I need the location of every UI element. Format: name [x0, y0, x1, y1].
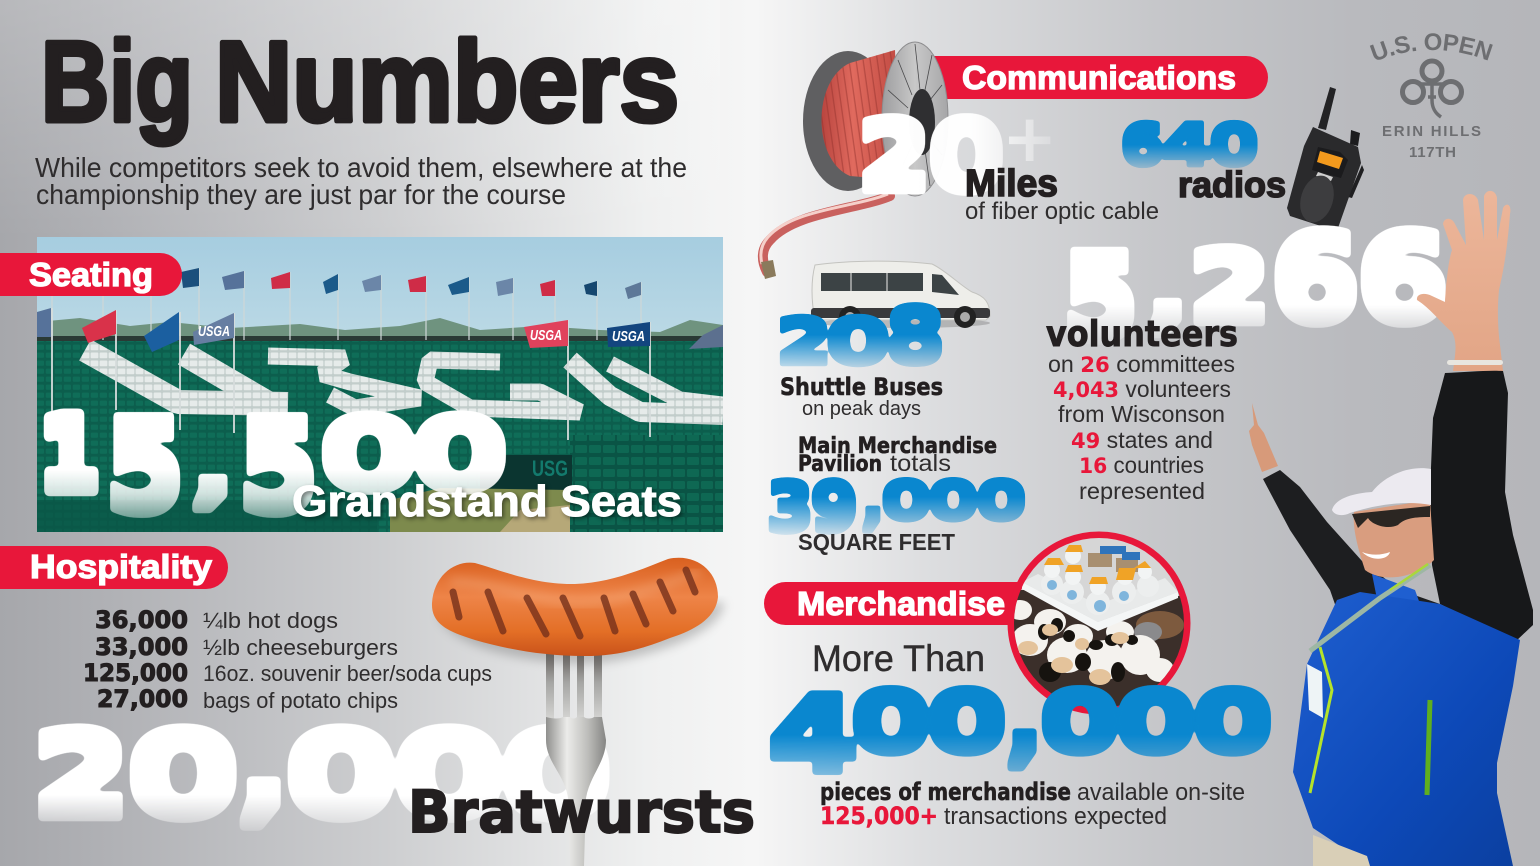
big number: 15,500: 0: [319, 398, 419, 510]
big number: 15,500: 0: [411, 399, 509, 511]
stat: main merchandise pavilion: Pavilion: [798, 452, 882, 477]
grill marks: [453, 570, 695, 636]
raised right hand: [1417, 191, 1510, 371]
big number: 5,266: 2: [1187, 231, 1272, 343]
logo: U.S. Open Erin Hills: [1370, 33, 1493, 161]
lower shelf of plush cows: [1014, 590, 1184, 707]
photo: green grandstand: [37, 340, 723, 532]
heading pill: Hospitality: [0, 546, 228, 589]
big number: 20+: [862, 113, 1050, 196]
stat: main merchandise pavilion: totals: [890, 450, 951, 476]
stat: shuttle buses: [780, 373, 943, 420]
list item: chips: 27,000: [97, 685, 188, 713]
stat: volunteers: [1046, 314, 1238, 504]
big number: 39,000: 0: [928, 472, 979, 531]
stat: shuttle buses: on peak days: [802, 398, 921, 420]
big number: 208: 0: [825, 305, 891, 377]
big number: 39,000: 9: [810, 470, 859, 547]
big number: 20,000: 0: [126, 710, 240, 841]
photo: lower darker seating, sign and grass: USG: [532, 456, 568, 481]
stat: merchandise details: available on-site: [1077, 779, 1245, 806]
icon: walkie talkie: [1287, 87, 1364, 229]
volunteer details: represented: [1079, 478, 1205, 504]
heading pill: Seating: [0, 253, 182, 296]
big number: 400,000: 0: [1116, 675, 1196, 770]
big number: 400,000: 0: [1040, 675, 1120, 770]
credential badge: [1307, 664, 1323, 718]
blue jacket: [1293, 592, 1520, 866]
tines: [546, 650, 602, 722]
logo: U.S. Open Erin Hills: 117TH: [1409, 144, 1456, 161]
big number: 208: 8: [885, 293, 945, 380]
black left sleeve: [1263, 470, 1440, 625]
big number: 400,000: ,: [1005, 662, 1044, 775]
big number: 20,000: [38, 723, 610, 831]
stat: shuttle buses: Shuttle Buses: [780, 373, 943, 401]
clover emblem: [1402, 61, 1462, 117]
big number: 20+: +: [1002, 100, 1057, 177]
big number: 400,000: 0: [1192, 675, 1273, 770]
list item: cups: 125,000: [83, 659, 188, 687]
big number: 5,266: 5: [1062, 230, 1139, 364]
big number: 39,000: 0: [881, 472, 932, 531]
big number: 400,000: 4: [768, 675, 859, 794]
big number: 20,000: 2: [31, 710, 131, 841]
white cap: [1332, 468, 1431, 515]
volunteer details: from Wisconson: [1058, 401, 1225, 427]
big number: 39,000: 0: [976, 472, 1027, 531]
display shelf with snowmen: [1022, 538, 1180, 631]
heading pill: Communications: [930, 56, 1268, 99]
big number: 39,000: [768, 477, 1026, 535]
photo: front row of USGA flags: USGA: [198, 323, 230, 340]
big number: 208: 2: [776, 307, 833, 378]
photo: back row of USGA flags: [52, 268, 641, 340]
bracelet: [1447, 360, 1503, 365]
panel: seating photo: [37, 237, 723, 532]
list item: cups: [83, 659, 492, 687]
big number: 640: 6: [1120, 113, 1165, 176]
heading pill: Merchandise: [764, 582, 1044, 625]
face: [1354, 500, 1434, 577]
heading pill: Communications: Communications: [962, 59, 1236, 96]
stat: volunteers: volunteers: [1046, 314, 1238, 355]
list item: cups: 16oz. souvenir beer/soda cups: [203, 661, 492, 686]
stat: merchandise details: pieces of merchandise: [820, 778, 1071, 806]
photo: front row of USGA flags: USGA: [530, 327, 562, 344]
big number: 20,000: 0: [284, 710, 398, 841]
list item: chips: bags of potato chips: [203, 688, 398, 713]
big number: 20,000: 0: [392, 710, 506, 841]
heading pill: Merchandise: Merchandise: [797, 585, 1005, 622]
heading pill: Hospitality: Hospitality: [30, 548, 213, 585]
rear flange: [803, 51, 893, 191]
logo: U.S. Open Erin Hills: U.S. OPEN: [1370, 33, 1493, 60]
icon: grilled bratwurst: [432, 558, 724, 664]
label: square feet: SQUARE FEET: [798, 529, 955, 555]
volunteer details: on 26 committees: [1048, 351, 1235, 377]
big number: 5,266: ,: [1144, 240, 1191, 342]
subtitle: While competitors seek to avoid them, elsewhere at the: [35, 152, 687, 183]
big number: 5,266: [1067, 225, 1446, 342]
stat: merchandise details: 125,000+: [820, 802, 938, 830]
list item: cheeseburgers: ½lb cheeseburgers: [203, 635, 398, 660]
big number: 39,000: 3: [766, 469, 814, 546]
subtitle: [35, 152, 687, 210]
front flange: [882, 42, 948, 196]
fork head and handle: [546, 717, 606, 866]
photo: white seats spelling letters: [85, 350, 723, 415]
big number: 20,000: ,: [236, 695, 292, 835]
photo: front row of USGA flags: [37, 308, 723, 440]
khaki trousers: [1313, 835, 1370, 866]
sunglasses: [1352, 506, 1430, 528]
hospitality list: [83, 606, 492, 713]
subtitle: championship they are just par for the course: [36, 179, 566, 210]
green zip and lanyard: [1310, 564, 1430, 795]
volunteer details: 49 states and: [1071, 427, 1213, 453]
photo: tree line: [51, 318, 723, 336]
volunteer details: [1048, 351, 1235, 504]
list item: chips: [97, 685, 398, 713]
heading pill: Seating: Seating: [29, 256, 153, 293]
list item: hot dogs: 36,000: [95, 606, 188, 634]
big number: 20+: 2: [857, 101, 932, 211]
big number: 640: [1122, 120, 1258, 168]
big number: 39,000: ,: [860, 464, 885, 537]
big number: 5,266: 6: [1356, 209, 1449, 348]
title: Big: [41, 19, 193, 146]
big number: 20,000: 0: [499, 710, 613, 841]
photo: front row of USGA flags: USGA: [612, 328, 645, 345]
raised left hand: [1249, 403, 1278, 472]
coil: [822, 50, 900, 180]
black right sleeve: [1430, 371, 1533, 642]
label: Bratwursts: Bratwursts: [408, 778, 755, 846]
big number: 15,500: 1: [39, 399, 99, 511]
icon: fork: [546, 650, 606, 866]
volunteer details: 16 countries: [1079, 452, 1204, 478]
figure: volunteer with raised arms: [1249, 191, 1533, 866]
icon: shuttle van: [811, 261, 990, 328]
big number: 15,500: 5: [238, 394, 319, 540]
big number: 15,500: 5: [104, 394, 185, 540]
list item: hot dogs: ¼lb hot dogs: [203, 608, 338, 633]
label: Grandstand Seats: Grandstand Seats: [292, 477, 682, 526]
big number: 400,000: [770, 684, 1272, 776]
logo: U.S. Open Erin Hills: ERIN HILLS: [1382, 123, 1481, 140]
big number: 208: [780, 302, 942, 368]
stat: main merchandise pavilion: [798, 434, 997, 477]
big number: 20+: 0: [928, 103, 1005, 212]
list item: cheeseburgers: 33,000: [95, 633, 188, 661]
list item: hot dogs: [95, 606, 338, 634]
stat: miles of cable: Miles: [965, 163, 1058, 205]
big number: 5,266: 6: [1270, 210, 1360, 348]
photo: lower darker seating, sign and grass: [37, 435, 723, 532]
big number: 640: 0: [1209, 114, 1259, 177]
big number: 15,500: [44, 408, 506, 518]
big number: 400,000: 0: [850, 675, 931, 770]
stat: merchandise details: transactions expected: [944, 803, 1167, 830]
label: more than: More Than: [812, 638, 985, 679]
label: radios: radios: [1178, 164, 1286, 205]
big number: 15,500: ,: [189, 417, 237, 516]
blue collar: [1372, 574, 1420, 604]
stat: merchandise details: [820, 778, 1245, 830]
icon: cable spool with fibre tail: [761, 42, 948, 279]
title: Numbers: [215, 19, 679, 146]
photo: merchandise circle: [1008, 530, 1190, 715]
list item: cheeseburgers: [95, 633, 398, 661]
tail: [763, 196, 890, 272]
big number: 400,000: 0: [926, 675, 1007, 770]
stat: main merchandise pavilion: Main Merchandise: [798, 434, 997, 459]
stat: miles of cable: [965, 163, 1159, 225]
title: [41, 19, 679, 146]
volunteer details: 4,043 volunteers: [1053, 376, 1231, 402]
stat: miles of cable: of fiber optic cable: [965, 198, 1159, 225]
big number: 640: 4: [1161, 114, 1213, 177]
